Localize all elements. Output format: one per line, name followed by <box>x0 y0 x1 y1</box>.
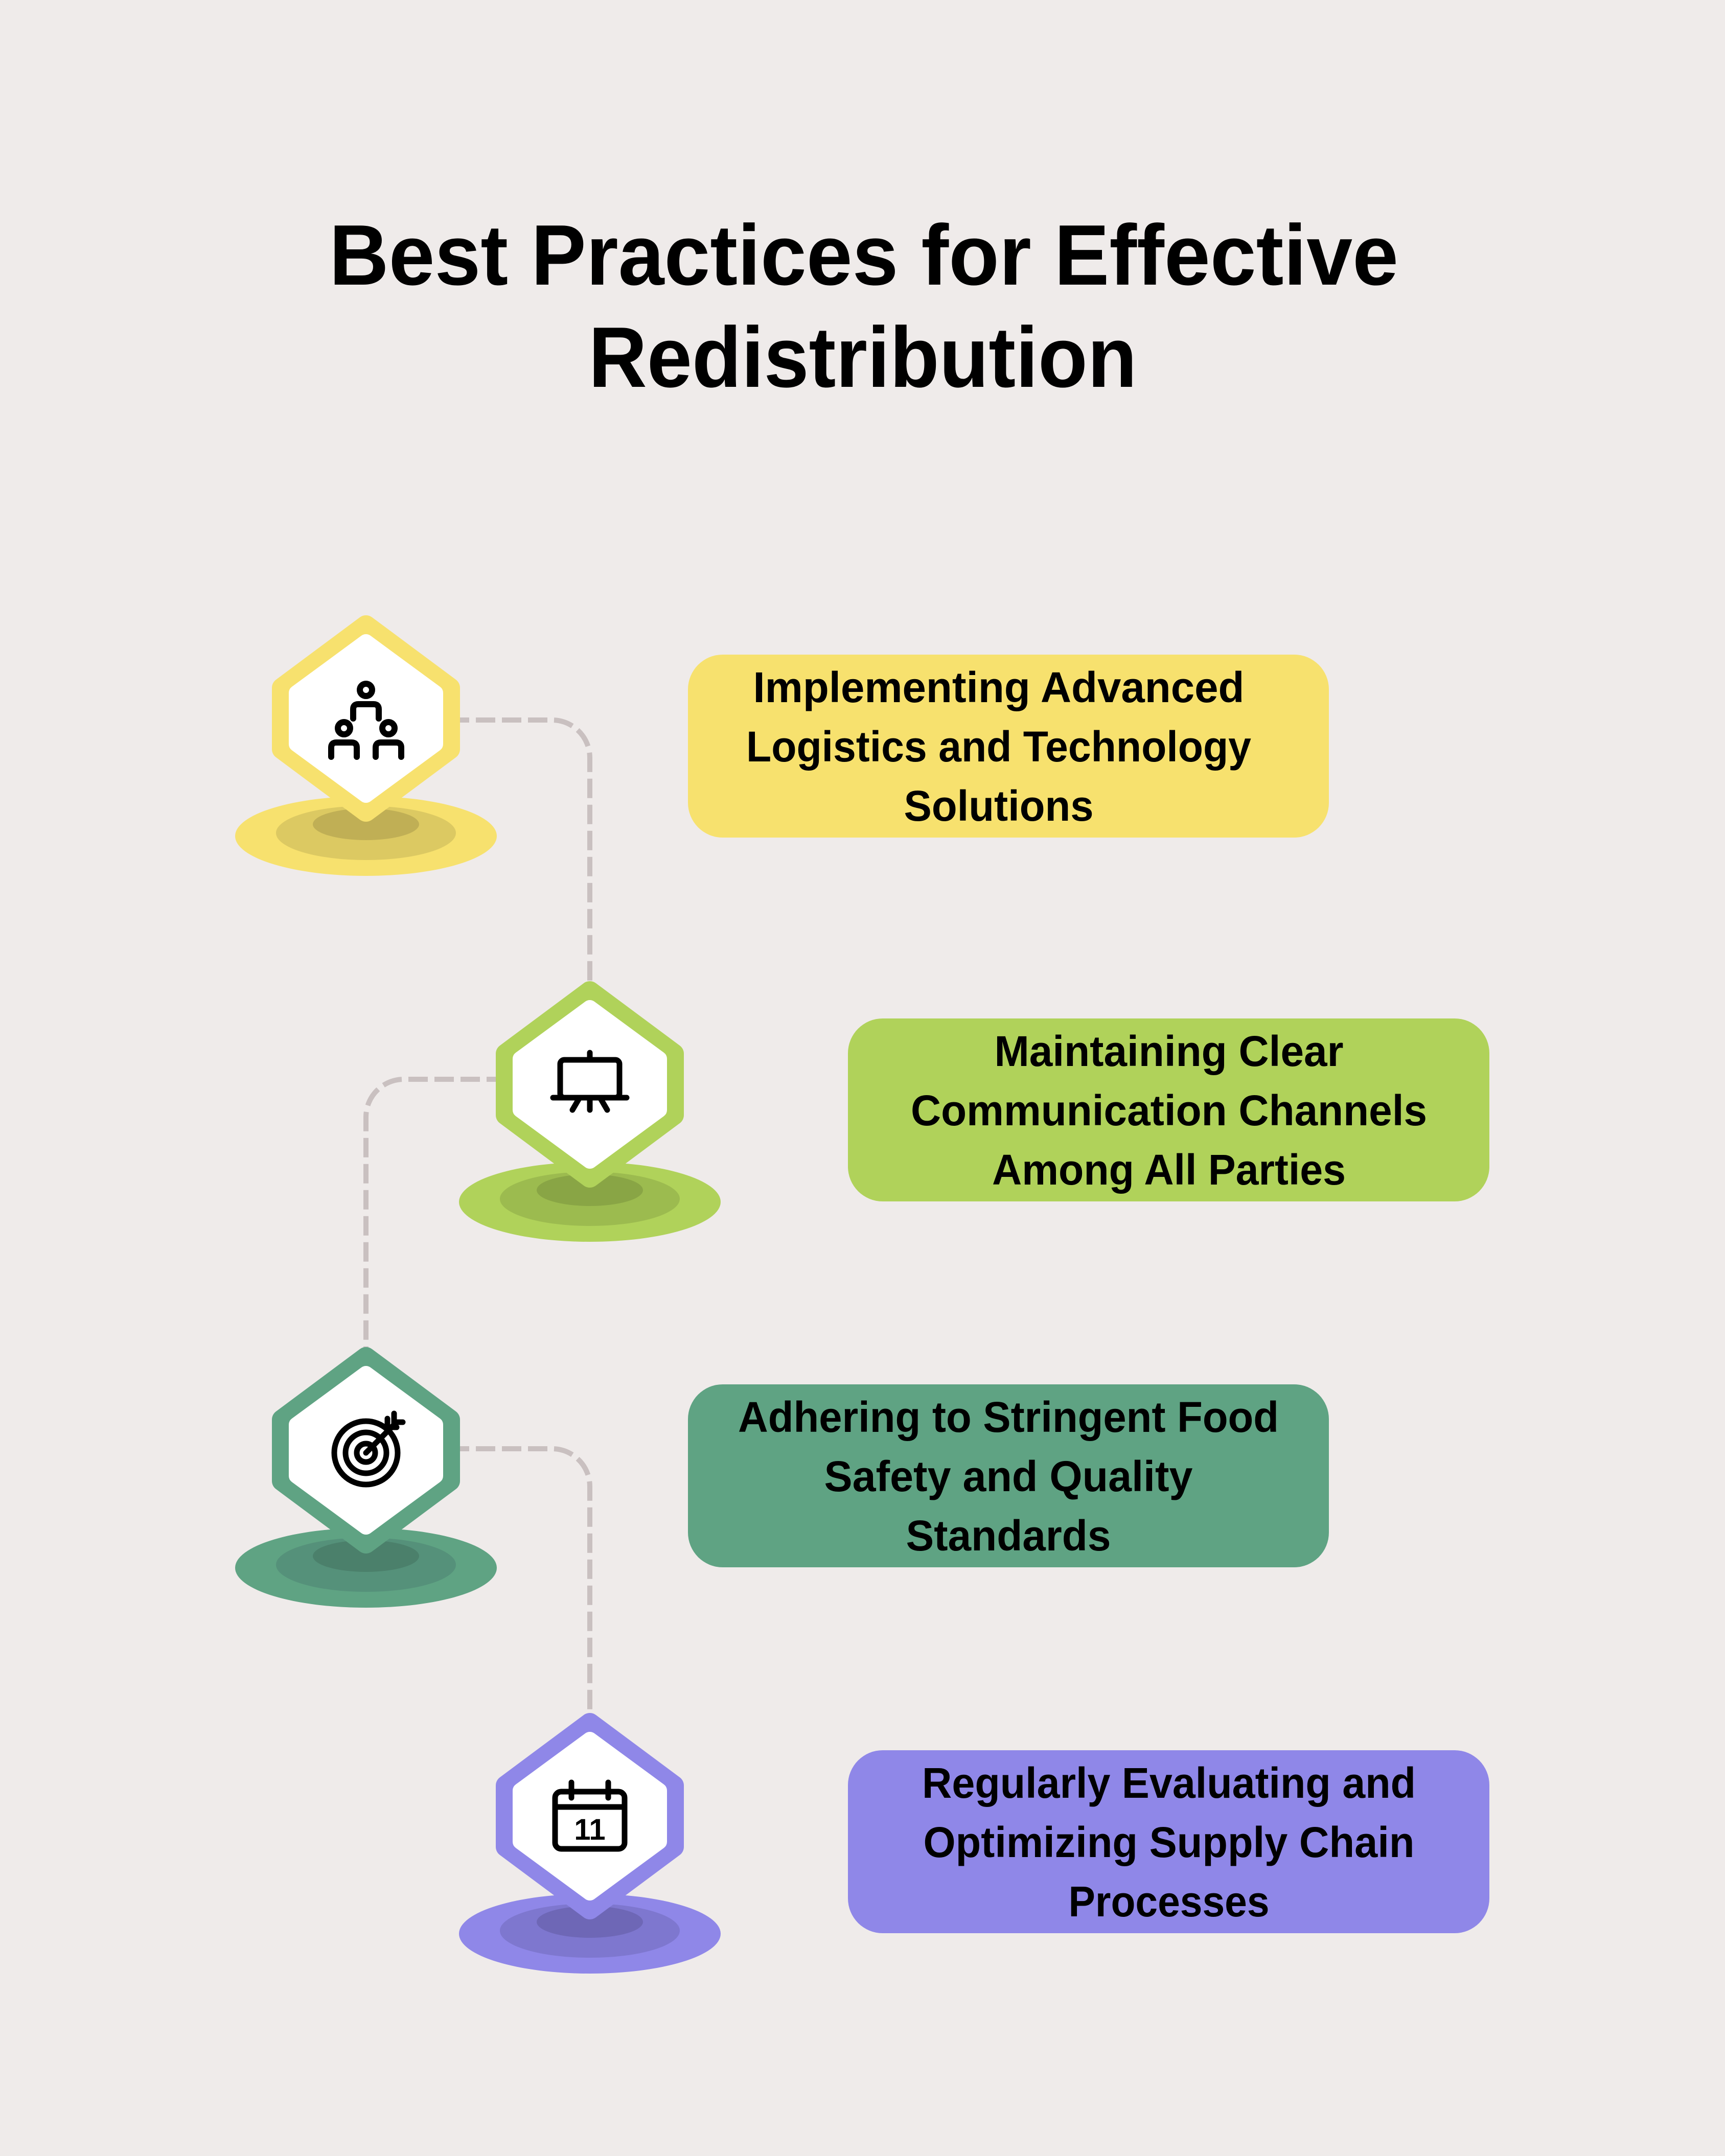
icon: presentation board <box>553 1053 627 1110</box>
box 3 <box>688 1384 1329 1567</box>
box 1: Solutions <box>904 782 1094 830</box>
box 4: Processes <box>1068 1877 1270 1926</box>
box 2: Among All Parties <box>992 1146 1346 1194</box>
box 4 <box>848 1750 1489 1933</box>
marker 3: target icon <box>235 1357 497 1608</box>
box 4: Regularly Evaluating and <box>922 1759 1416 1807</box>
title <box>329 207 1398 405</box>
icon: calendar: 11 <box>574 1813 606 1846</box>
box 2: Maintaining Clear <box>995 1027 1343 1075</box>
marker 2: presentation board icon <box>459 991 721 1242</box>
connector: step 3 to step 4 <box>450 1449 590 1722</box>
box 3: Standards <box>906 1512 1111 1560</box>
connector: step 1 to step 2 <box>450 720 590 986</box>
icon: people hierarchy <box>331 684 401 757</box>
icon: target <box>334 1413 403 1485</box>
icon: calendar <box>555 1782 625 1849</box>
box 2: Communication Channels <box>911 1086 1427 1134</box>
box 3: Adhering to Stringent Food <box>738 1393 1279 1441</box>
box 1 <box>688 655 1329 838</box>
box 1: Implementing Advanced <box>753 663 1244 711</box>
marker 1: people icon <box>235 625 497 876</box>
title: Redistribution <box>589 309 1137 405</box>
connector: step 2 to step 3 <box>366 1079 506 1354</box>
box 4: Optimizing Supply Chain <box>923 1818 1415 1866</box>
box 3: Safety and Quality <box>824 1452 1193 1500</box>
title: Best Practices for Effective <box>329 207 1398 303</box>
box 1: Logistics and Technology <box>746 723 1251 771</box>
box 2 <box>848 1018 1489 1201</box>
marker 4: calendar icon <box>459 1723 721 1974</box>
